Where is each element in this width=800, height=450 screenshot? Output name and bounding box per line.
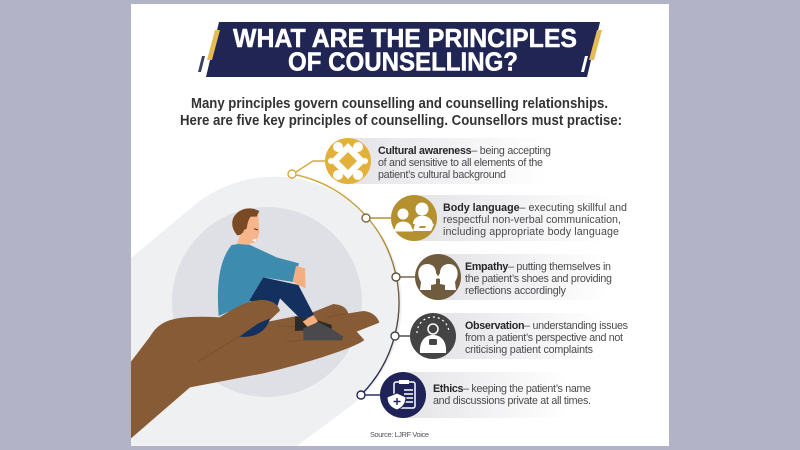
person eye (254, 229, 258, 230)
icon: person holding an object (417, 317, 449, 353)
icon: two people at a table (394, 202, 434, 232)
text: Cultural awareness– being accepting (378, 145, 551, 157)
text: of and sensitive to all elements of the (378, 157, 543, 169)
person hair (232, 208, 259, 235)
icon: clipboard and shield (387, 380, 415, 410)
title banner: OF COUNSELLING? (288, 46, 518, 76)
palm crease (198, 313, 347, 362)
text: Empathy– putting themselves in (465, 261, 611, 273)
curved timeline arc (292, 174, 399, 395)
item: body language (362, 195, 627, 241)
intro text (180, 95, 622, 129)
title: WHAT ARE THE PRINCIPLES (233, 23, 577, 53)
icon: linked people (328, 142, 368, 180)
text: Observation– understanding issues (465, 320, 628, 332)
text: including appropriate body language (443, 226, 619, 238)
back shoe (295, 317, 332, 331)
item: observation (391, 313, 628, 359)
text: and discussions private at all times. (433, 395, 591, 407)
text: Body language– executing skillful and (443, 202, 627, 214)
text: reflections accordingly (465, 285, 567, 297)
illustration: person on a hand (131, 208, 379, 438)
person legs (249, 277, 314, 320)
intro text: Many principles govern counselling and counselling relationships. (191, 95, 608, 112)
person hand (293, 266, 306, 288)
item: empathy (392, 254, 612, 300)
person mouth (252, 239, 257, 242)
intro text: Here are five key principles of counselling. Counsellors must practise: (180, 112, 622, 129)
text (465, 320, 628, 356)
panel: white card (131, 4, 669, 446)
text (433, 383, 591, 407)
background circle (172, 207, 362, 397)
text (443, 202, 627, 238)
icon: two facing heads (418, 264, 458, 290)
person neck and face (237, 213, 259, 247)
person torso (218, 244, 299, 316)
item: cultural awareness (288, 138, 551, 184)
hand palm and thumb (131, 300, 364, 438)
source note: Source: LJRF Voice (370, 430, 429, 439)
front shoe (303, 322, 343, 340)
item: ethics (357, 372, 591, 418)
text (465, 261, 612, 297)
hip under hand (239, 318, 270, 337)
title banner (198, 22, 602, 77)
text: patient’s cultural background (378, 169, 506, 181)
text: from a patient’s perspective and not (465, 332, 623, 344)
ankle (303, 315, 318, 328)
text: criticising patient complaints (465, 344, 593, 356)
background shadow shape (131, 177, 402, 446)
text: Ethics– keeping the patient’s name (433, 383, 591, 395)
text: the patient’s shoes and providing (465, 273, 612, 285)
text: respectful non-verbal communication, (443, 214, 621, 226)
text (378, 145, 551, 181)
back fingers (268, 304, 379, 337)
